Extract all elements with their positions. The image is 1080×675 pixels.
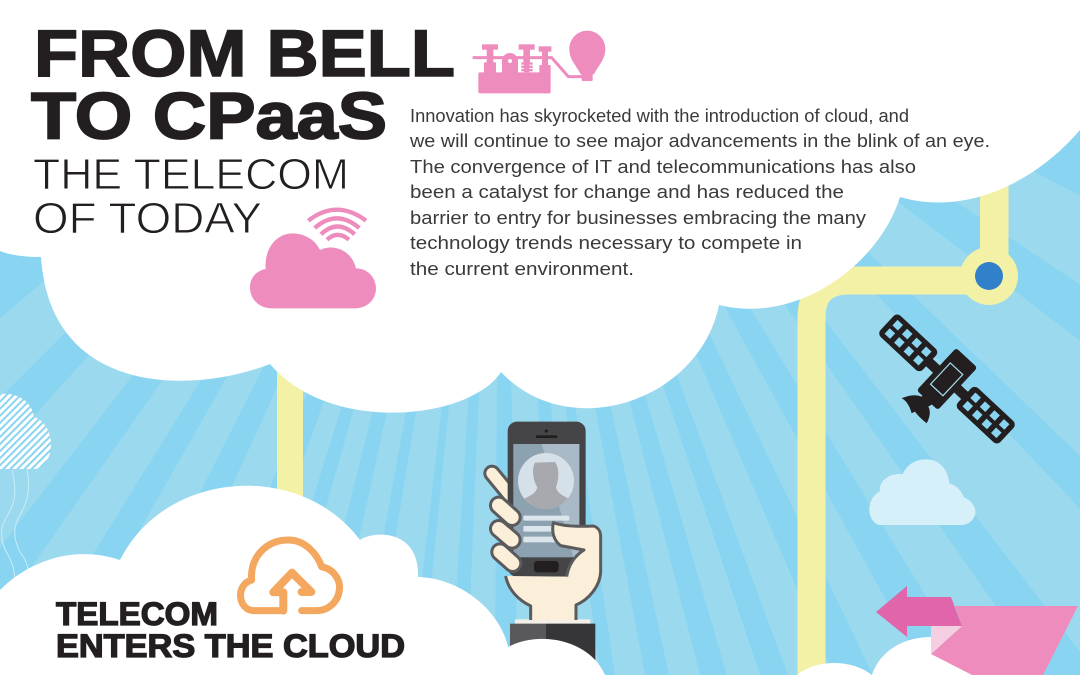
title: TO CPaaS [31, 78, 387, 152]
arrow: pointing left [876, 586, 962, 637]
icon: cloud with wifi [250, 210, 376, 308]
intro paragraph: Innovation has skyrocketed with the introduction of cloud, and [410, 106, 909, 126]
title: FROM BELL [34, 16, 455, 90]
subtitle [33, 150, 349, 243]
section heading: TELECOM [56, 596, 218, 632]
illustration: hand holding smartphone [492, 422, 601, 667]
icon: satellite [867, 302, 1027, 456]
icon: pink paper plane [931, 606, 1078, 675]
index finger behind phone [492, 473, 512, 497]
icon: telegraph key and bulb [473, 31, 605, 93]
intro paragraph: been a catalyst for change and has reduced the [410, 182, 844, 202]
subtitle: THE TELECOM [33, 150, 349, 199]
icon: hatched cloud right [869, 459, 975, 525]
connector: yellow line right with node [812, 170, 1018, 675]
icon: hatched cloud left [0, 394, 51, 585]
intro paragraph: we will continue to see major advancements in the blink of an eye. [409, 131, 990, 151]
intro paragraph [409, 106, 990, 279]
sleeve and cuff [510, 619, 595, 667]
top cloud [0, 0, 1080, 413]
bottom left cloud [0, 486, 605, 675]
fingers [499, 505, 513, 563]
connector: yellow line left [277, 360, 303, 510]
palm and thumb [506, 523, 601, 620]
intro paragraph: the current environment. [410, 259, 634, 279]
intro paragraph: technology trends necessary to compete in [410, 233, 802, 253]
section heading: ENTERS THE CLOUD [56, 628, 405, 664]
intro paragraph: The convergence of IT and telecommunications has also [410, 157, 916, 177]
title [31, 16, 455, 152]
intro paragraph: barrier to entry for businesses embracing the many [410, 208, 866, 228]
bottom right cloud [797, 637, 975, 675]
phone body [508, 422, 586, 577]
icon: orange cloud upload [241, 540, 340, 611]
subtitle: OF TODAY [33, 194, 262, 243]
section heading [56, 596, 405, 664]
